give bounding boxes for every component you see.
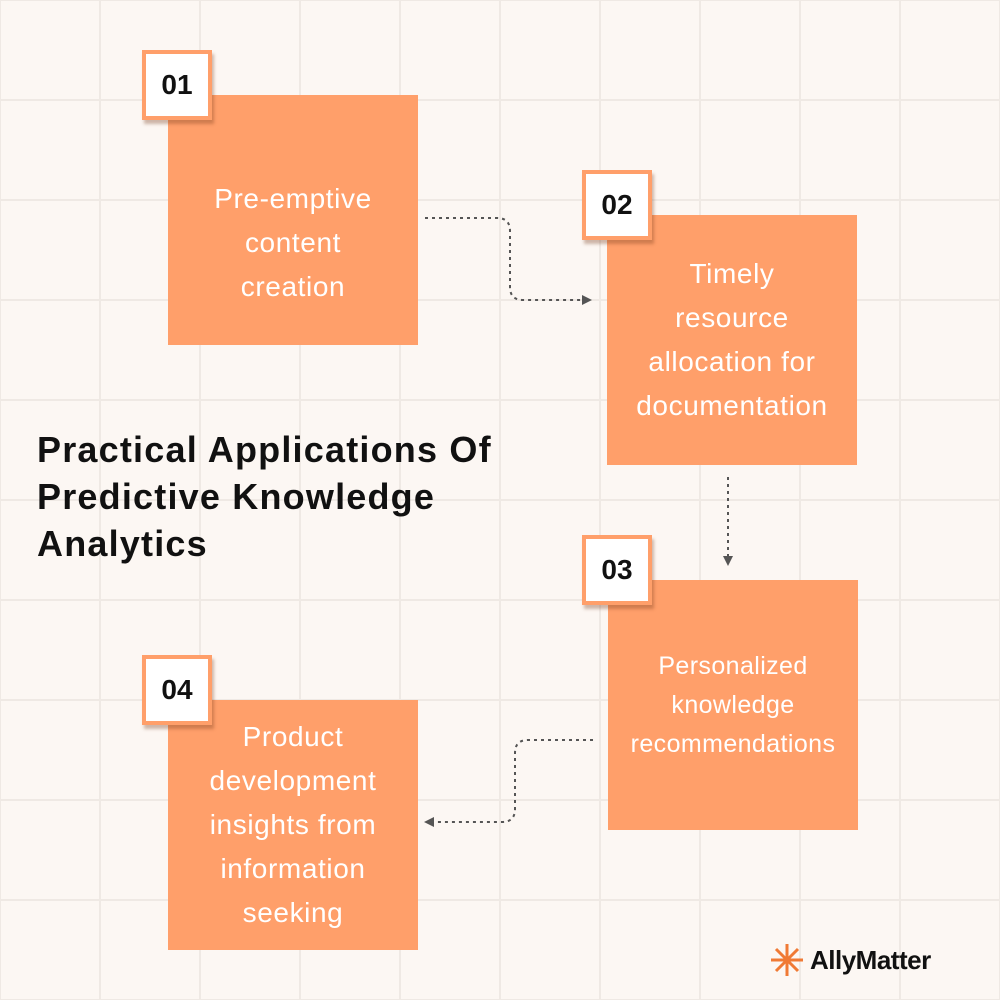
card 4: insights from — [210, 809, 376, 840]
card 4: information — [220, 853, 366, 884]
card 2: resource — [675, 302, 789, 333]
card 3: Personalized — [658, 652, 808, 680]
badge 03 — [582, 535, 652, 605]
badge 02: 02 — [601, 189, 633, 220]
logo: AllyMatter — [810, 944, 931, 974]
card 4: development — [210, 765, 376, 796]
title — [37, 429, 492, 564]
card 1: Pre-emptive — [214, 183, 372, 214]
badge 04 — [142, 655, 212, 725]
badge 01 — [142, 50, 212, 120]
badge 04: 04 — [161, 674, 193, 705]
title: Practical Applications Of — [37, 429, 492, 470]
badge 01: 01 — [161, 69, 193, 100]
card 2: Timely — [689, 258, 774, 289]
title: Predictive Knowledge — [37, 476, 435, 517]
card 3: knowledge — [671, 690, 795, 718]
badge 02 — [582, 170, 652, 240]
card 1: content — [245, 227, 341, 258]
card 4 — [168, 700, 418, 950]
card 2: documentation — [636, 390, 828, 421]
card 4: Product — [243, 721, 343, 752]
card 4: seeking — [243, 897, 343, 928]
card 3 — [608, 580, 858, 830]
card 2 — [607, 215, 857, 465]
card 1 — [168, 95, 418, 345]
card 1: creation — [241, 271, 345, 302]
title: Analytics — [37, 523, 208, 564]
card 3: recommendations — [631, 730, 835, 758]
card 2: allocation for — [648, 346, 816, 377]
badge 03: 03 — [601, 554, 633, 585]
